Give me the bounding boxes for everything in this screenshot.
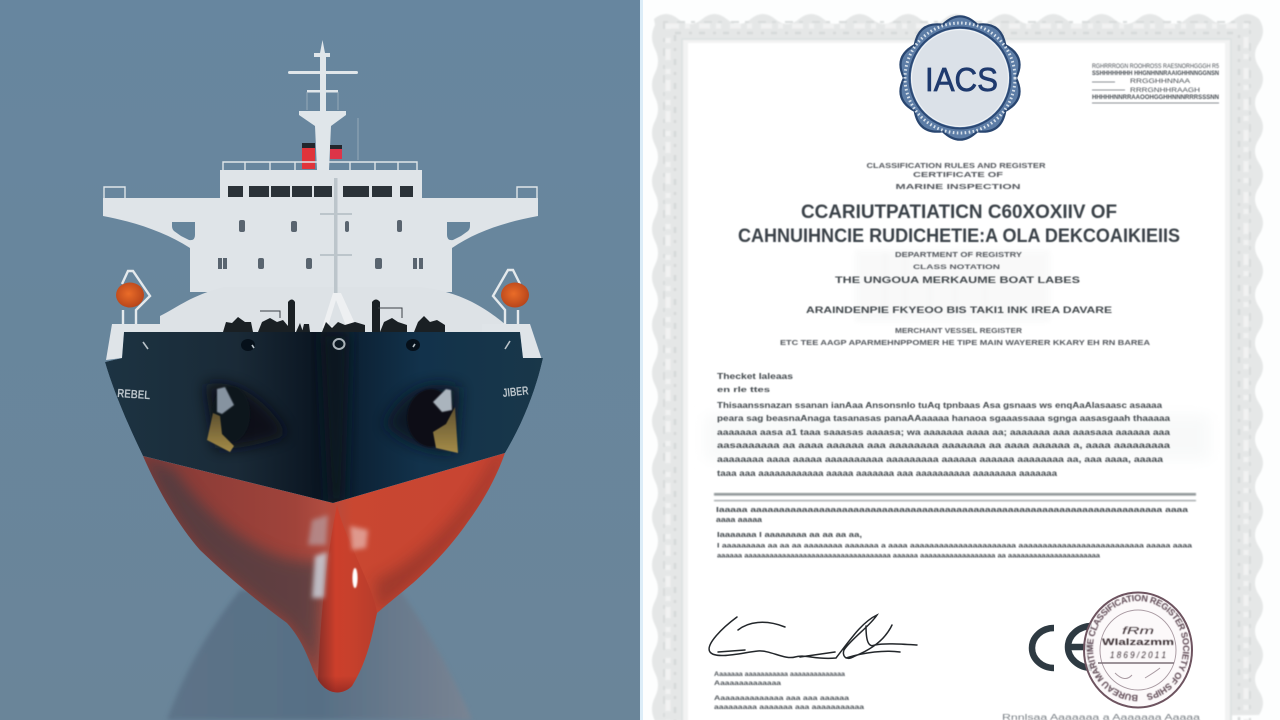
reference block top right: RRRGNHHRAAGH (1130, 88, 1200, 94)
stamp text: Wlalzazmm (1102, 637, 1174, 647)
seal label: IACS (925, 61, 998, 98)
lower clause lines: aaaa aaaaa (716, 515, 763, 524)
stamp text: 1 8 6 9 / 2 0 1 1 (1110, 650, 1166, 660)
CE mark (1032, 626, 1092, 668)
seal: IACS (900, 16, 1020, 140)
certificate title: CCARIUTPATIATICN C60XOXIIV OF (801, 202, 1117, 223)
body text block: peara sag beasnaAnaga tasanasas panaAAaaaaa hanaoa sgaaassaaa sgnga aasasgaah thaaaaa (717, 414, 1171, 423)
subtitle lines: MERCHANT VESSEL REGISTER (895, 328, 1022, 335)
bulbous bow (318, 505, 377, 692)
hawse pipe and anchor left (207, 386, 250, 452)
lower hull edge shading (143, 456, 322, 680)
body text block (717, 372, 1171, 478)
watermark: faint body band (705, 415, 1210, 460)
header lines (866, 161, 1046, 191)
body text block: aaaaaaa aasa a1 taaa saaasas aaaasa; wa aaaaaaa aaaa aa; aaaaaaa aaa aaasaaa aaaaaa aaa (717, 428, 1171, 437)
bow bulwark (106, 324, 542, 360)
stamp text: fRm (1122, 626, 1154, 637)
round stamp (1083, 592, 1193, 708)
hull upper dark section (105, 332, 543, 503)
foredeck (160, 287, 505, 334)
reference block top right (1092, 64, 1220, 103)
body text block: en rle ttes (717, 387, 770, 394)
header lines: CERTIFICATE OF (913, 170, 1004, 179)
body text block: aasaaaaaaa aa aaaa aaaaaa aaa aaaaaaaa aaaaaaa aa aaaa aaaaaa a, aaaa aaaaaaaaa (717, 441, 1171, 450)
reflection under bow (167, 590, 472, 720)
lower clause lines (716, 505, 1193, 560)
funnels (302, 143, 342, 169)
deck equipment (223, 300, 445, 332)
subtitle lines: ETC TEE AAGP APARMEHNPPOMER HE TIPE MAIN WAYERER KKARY EH RN BAREA (780, 340, 1150, 347)
accommodation block (103, 162, 538, 292)
hull lower red section (143, 453, 505, 692)
radar mast (288, 40, 358, 170)
bow highlights (308, 515, 368, 598)
certificate title (738, 202, 1180, 247)
signatory details: Aaaaaaaaaaaaaa (714, 681, 782, 687)
subtitle lines: CLASS NOTATION (913, 265, 1000, 271)
portholes (218, 220, 423, 269)
subtitle lines: ARAINDENPIE FKYEOO BIS TAKI1 INK IREA DAVARE (806, 305, 1112, 316)
header lines: MARINE INSPECTION (896, 182, 1020, 191)
signatory details: Aaaaaaaaaaaaaa aaa aaa aaaaaa (714, 696, 850, 702)
body text block: Thisaanssnazan ssanan ianAaa Ansonsnlo tuAq tpnbaas Asa gsnaas ws enqAaAlasaasc asaaaa (717, 401, 1163, 410)
lower clause lines: Iaaaaaaa I aaaaaaaa aa aa aa aa, (717, 530, 862, 539)
reference block top right: RGHRRROGN ROOHROSS RAESNORHGGGH R5 (1092, 64, 1220, 70)
panel: ship photo (0, 0, 640, 720)
lower clause lines: I aaaaaaaaa aa aa aa aaaaaaaa aaaaaaa a aaaa aaaaaaaaaaaaaaaaaaaaaa aaaaaaaaaaaaaaaaaaaaaaaaaa aaaaa aaaa (717, 542, 1193, 550)
bow marking left: REBEL (117, 386, 151, 402)
hull shadows (205, 383, 287, 448)
wing cut-outs (172, 222, 195, 240)
body text block: aaaaaaaa aaaa aaaaa aaaaaaaaaa aaaaaaaaa aaaaaa aaaaaa aaaaaaaa aa, aaa aaaa, aaaaa (717, 455, 1164, 464)
double rule (714, 493, 1196, 501)
decorative guilloche border (652, 14, 1263, 720)
signatory details: Aaaaaaa aaaaaaaaaaa aaaaaaaaaaaaaa (714, 672, 846, 678)
lifeboat right (493, 270, 529, 326)
header lines: CLASSIFICATION RULES AND REGISTER (866, 161, 1046, 170)
reference block top right: SSHHHHHHHH HHGNHNNRAAIGHHNNGGNSN (1092, 71, 1219, 77)
body text block: taaa aaa aaaaaaaaaaaa aaaaa aaaaaaa aaa aaaaaaaaaa aaaaaaaa aaaaaaa (717, 469, 1058, 478)
reference block top right: RRGGHHNNAA (1130, 79, 1190, 85)
certificate title: CAHNUIHNCIE RUDICHETIE:A OLA DEKCOAIKIEIIS (738, 226, 1180, 247)
lower clause lines: Iaaaaa aaaaaaaaaaaaaaaaaaaaaaaaaaaaaaaaaaaaaaaaaaaaaaaaaaaaaaaaaaaaaaaaaaaaaaaa aaaa (716, 505, 1189, 514)
lower clause lines: aaaaaa aaaaaaaaaaaaaaaaaaaaaaaaaaaaaaaaaaa aaaaaa aaaaaaaaaaaaaaaaaa aa aaaaaaaaaaaaaaaaaaaaaa (717, 552, 1100, 560)
panel: certificate (640, 0, 1264, 720)
signature (709, 615, 917, 658)
forward mast (320, 178, 357, 328)
signatory details: aaaaaaaaa aaaaaaa aaa aaaaaaaaaaa (714, 705, 865, 711)
bow marking right: JIBER (502, 383, 529, 400)
bridge windows (228, 186, 413, 197)
hawse pipe and anchor right (407, 389, 458, 453)
stamp ring text: BUREAU MARITIME CLASSIFICATION REGISTER SOCIETY OF SHIPS (1086, 594, 1190, 702)
watermark: faint building (855, 250, 1050, 322)
subtitle lines: DEPARTMENT OF REGISTRY (895, 252, 1022, 259)
body text block: Thecket Ialeaas (717, 372, 794, 381)
signatory details (714, 672, 865, 711)
reference block top right: HHHHHNNRRAAOOHGGHHNNNRRRSSSNN (1092, 95, 1219, 101)
stamp text (1102, 626, 1174, 660)
subtitle lines: THE UNGOUA MERKAUME BOAT LABES (835, 275, 1080, 285)
fairleads (143, 339, 510, 351)
subtitle lines (780, 252, 1150, 347)
lifeboat left (116, 271, 150, 326)
